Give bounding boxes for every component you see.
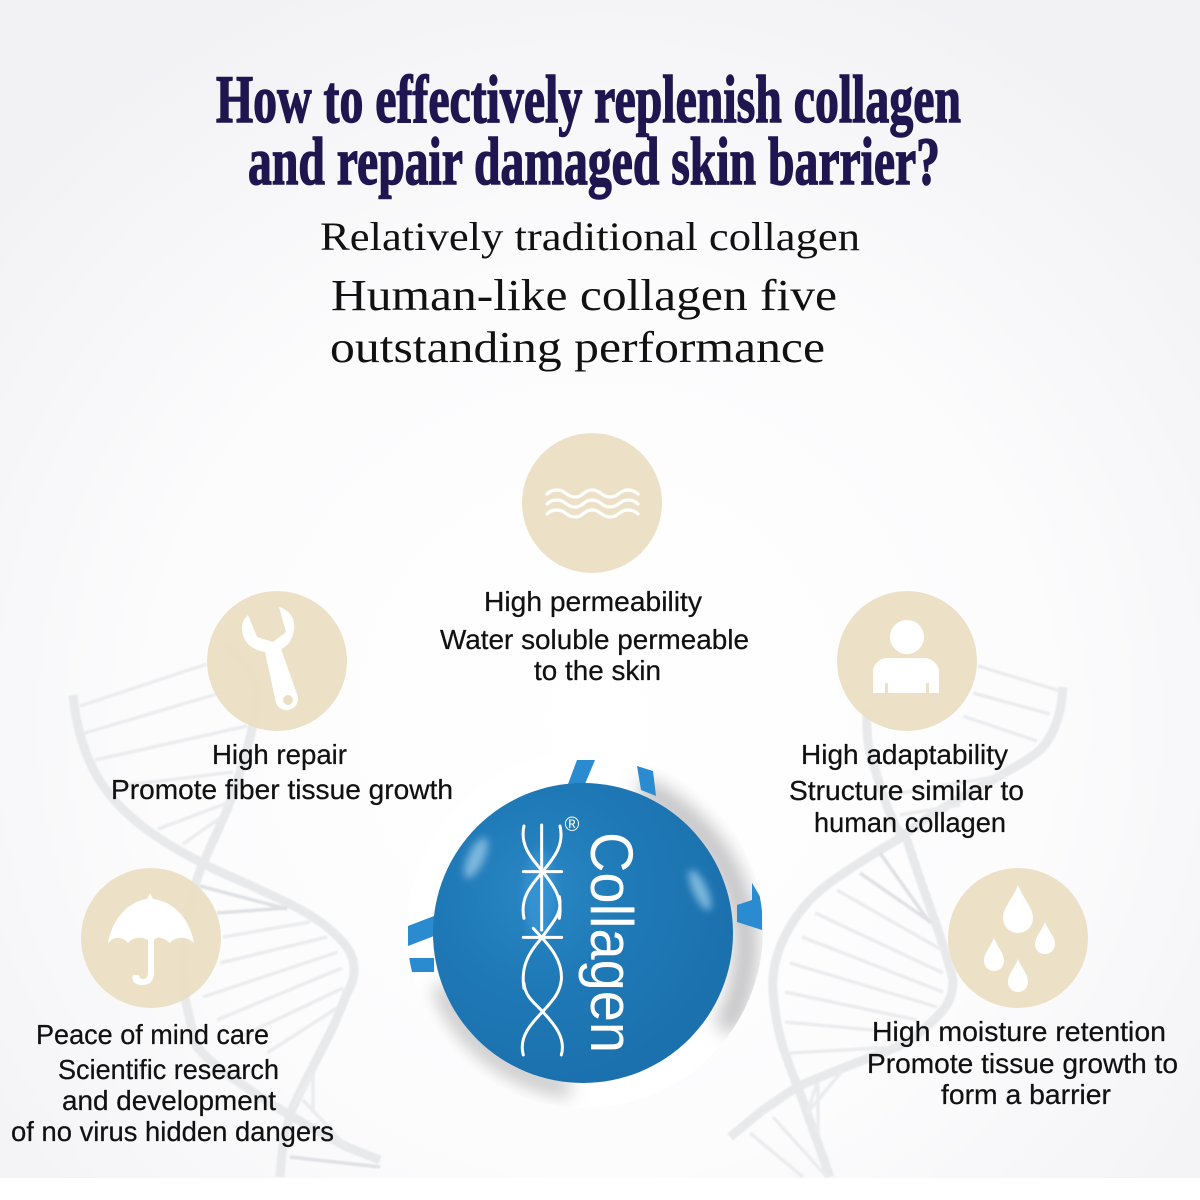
right DNA helix: [730, 666, 1063, 1177]
collagen capsule: [407, 752, 763, 1108]
icon: waves: [522, 433, 662, 573]
subtitle: [320, 214, 860, 372]
text: high permeability: [440, 586, 749, 686]
text: high repair: [111, 739, 453, 805]
capsule shell: [407, 752, 763, 1108]
text: high repair: Promote fiber tissue growth: [111, 774, 453, 805]
capsule blue ball: [433, 783, 733, 1083]
icon: person: [837, 591, 977, 731]
text: high moisture retention: Promote tissue growth to: [867, 1048, 1178, 1079]
text: high moisture retention: High moisture retention: [872, 1016, 1166, 1047]
icon: water drops: [948, 868, 1088, 1008]
subtitle: Relatively traditional collagen: [320, 214, 860, 259]
registered mark: ®: [565, 814, 580, 836]
text: peace of mind care: and development: [62, 1085, 276, 1116]
icon: wrench: [207, 591, 347, 731]
text: high permeability: Water soluble permeable: [440, 624, 749, 655]
feature: high moisture retention: [867, 868, 1178, 1110]
feature: high permeability: [440, 433, 749, 686]
text: peace of mind care: of no virus hidden dangers: [11, 1116, 334, 1147]
subtitle: outstanding performance: [330, 323, 825, 372]
capsule highlights: [459, 835, 716, 940]
icon: umbrella: [81, 868, 221, 1008]
text: peace of mind care: Scientific research: [58, 1054, 279, 1085]
text: peace of mind care: Peace of mind care: [36, 1019, 269, 1050]
feature: high repair: [111, 591, 453, 805]
text: high moisture retention: form a barrier: [941, 1079, 1111, 1110]
text: high adaptability: [789, 739, 1024, 838]
left DNA helix: [73, 645, 380, 1177]
text: high permeability: High permeability: [484, 586, 702, 617]
logo mark: [522, 825, 562, 1055]
text: high adaptability: Structure similar to: [789, 775, 1024, 806]
subtitle: Human-like collagen five: [331, 271, 837, 320]
capsule brand name: Collagen: [578, 832, 645, 1053]
title: [216, 61, 961, 199]
text: high permeability: to the skin: [534, 655, 661, 686]
text: high adaptability: High adaptability: [801, 739, 1008, 770]
feature: high adaptability: [789, 591, 1024, 838]
feature: peace of mind care: [11, 868, 334, 1147]
text: high moisture retention: [867, 1016, 1178, 1110]
text: high repair: High repair: [212, 739, 347, 770]
text: high adaptability: human collagen: [814, 807, 1006, 838]
text: peace of mind care: [11, 1019, 334, 1147]
